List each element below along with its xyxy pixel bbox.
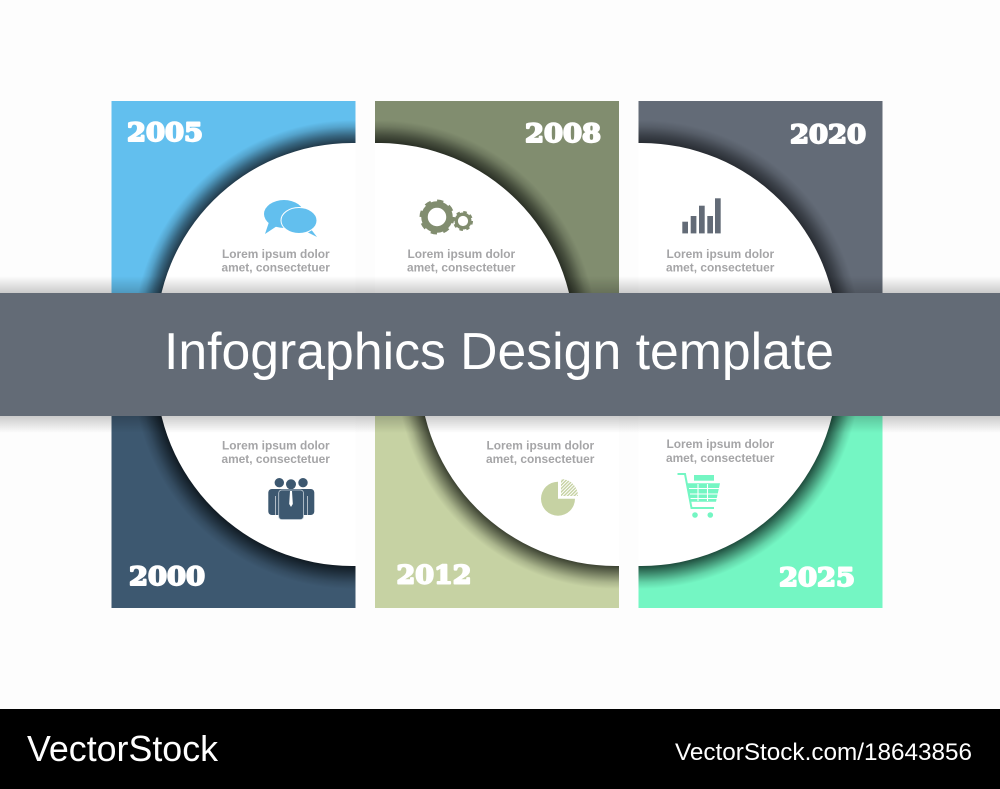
- text: lorem 2005: amet, consectetuer: [222, 260, 330, 274]
- icon: gears: [422, 202, 472, 232]
- text: lorem 2008: amet, consectetuer: [407, 260, 516, 274]
- text: lorem 2020: Lorem ipsum dolor: [666, 247, 775, 261]
- year: 2008: 2008: [525, 119, 601, 148]
- panel: 2025: [638, 416, 882, 608]
- text: lorem 2008: Lorem ipsum dolor: [408, 247, 516, 261]
- text: lorem 2000: Lorem ipsum dolor: [222, 438, 330, 452]
- icon: speech bubbles: [264, 200, 317, 237]
- band shadow: bottom: [0, 416, 1000, 433]
- panel: 2020: [638, 101, 882, 293]
- footer brand: VectorStock: [27, 728, 219, 769]
- text: lorem 2005: Lorem ipsum dolor: [222, 247, 330, 261]
- panel: 2012: [375, 416, 619, 608]
- panel: 2008: [375, 101, 619, 293]
- icon: bar chart: [682, 198, 721, 233]
- year: 2020: 2020: [790, 120, 866, 149]
- icon: pie chart: [541, 479, 578, 516]
- panel: 2000: [112, 416, 356, 608]
- title: Infographics Design template: [164, 323, 834, 381]
- year: 2005: 2005: [127, 118, 203, 147]
- band shadow: top: [0, 276, 1000, 293]
- text: lorem 2025: amet, consectetuer: [666, 451, 775, 465]
- icon: people: [268, 478, 314, 520]
- year: 2025: 2025: [779, 563, 855, 592]
- text: lorem 2000: amet, consectetuer: [222, 452, 330, 466]
- footer url: VectorStock.com/18643856: [675, 739, 972, 766]
- text: lorem 2020: amet, consectetuer: [666, 260, 775, 274]
- year: 2012: 2012: [396, 560, 472, 590]
- text: lorem 2012: Lorem ipsum dolor: [486, 438, 595, 452]
- text: lorem 2025: Lorem ipsum dolor: [666, 437, 775, 451]
- panel: 2005: [112, 101, 356, 293]
- title band: [0, 293, 1000, 416]
- icon: shopping cart: [678, 474, 720, 518]
- year: 2000: 2000: [129, 562, 205, 591]
- footer bar: [0, 709, 1000, 789]
- text: lorem 2012: amet, consectetuer: [486, 452, 595, 466]
